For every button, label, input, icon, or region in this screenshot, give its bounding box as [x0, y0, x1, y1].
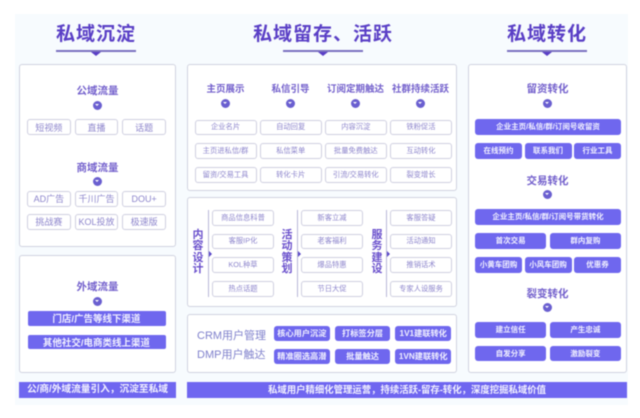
buttons: CRM: 1V1建联转化 [400, 329, 447, 338]
tags: public traffic: 直播 [88, 122, 106, 132]
tags row 2 [194, 142, 452, 160]
buttons: lead tools: 行业工具 [582, 146, 612, 155]
buttons: lead tools: 在线预约 [484, 146, 514, 155]
heading: 内容设计 [192, 228, 204, 275]
title: 私域留存、活跃: 私域留存、活跃 [253, 24, 393, 45]
buttons: trust and loyalty: 产生忠诚 [570, 325, 600, 334]
button: sales conversion: 企业主页/私信/群/订阅号带货转化 [492, 212, 604, 221]
tags row 1: 内容沉淀 [341, 122, 370, 131]
divider arrow [297, 210, 298, 297]
buttons: lead tools [474, 142, 622, 160]
title: 私域沉淀: 私域沉淀 [56, 24, 136, 45]
tags: service building [390, 210, 452, 298]
summary bar: left: 公/商/外域流量引入，沉淀至私域 [27, 384, 168, 395]
tags: service building: 活动通知 [406, 236, 436, 245]
heading: 服务建设: 设 [372, 263, 382, 275]
tags: public traffic: 话题 [135, 122, 153, 132]
heading: 活动策划: 划 [282, 263, 292, 275]
buttons: CRM: 核心用户沉淀 [277, 329, 326, 338]
heading: 外域流量: 外域流量 [76, 281, 118, 293]
buttons: trust and loyalty [474, 321, 622, 339]
title: 私域转化 [506, 23, 588, 56]
tags: commerce traffic row 2: 挑战赛 [35, 217, 62, 227]
buttons: group buying: 小黄车团购 [480, 260, 517, 269]
heading: 活动策划: 活 [282, 229, 292, 241]
tags row 2: 私信菜单 [276, 146, 305, 155]
title: 私域留存、活跃 [252, 23, 393, 56]
buttons: group buying: 小风车团购 [529, 260, 567, 269]
panel: conversion [468, 64, 627, 373]
tags: content design [212, 210, 274, 298]
icon: chevron [93, 176, 102, 186]
summary bar: middle and right [187, 382, 627, 398]
panel: public and commerce traffic [19, 64, 176, 247]
tags: campaign planning: 节日大促 [317, 284, 347, 293]
buttons: lead tools: 联系我们 [533, 146, 563, 155]
tags: commerce traffic row 1: AD广告 [34, 194, 64, 204]
tags row 2: 互动转化 [406, 146, 436, 155]
panel: content, campaigns, service [187, 197, 457, 307]
tags row 3: 留资/交易工具 [203, 170, 248, 179]
icon: chevron [543, 98, 552, 108]
tags: commerce traffic row 2 [26, 214, 166, 230]
tags row 2: 批量免费触达 [334, 146, 378, 155]
button: online channels: 其他社交/电商类线上渠道 [43, 338, 150, 349]
tags: campaign planning: 爆品特惠 [317, 260, 347, 269]
buttons: DMP: 精准圈选高潜 [277, 352, 326, 361]
heading: 内容设计: 内 [192, 229, 204, 241]
label: CRM: CRM用户管理 [197, 330, 266, 342]
tags row 3: 裂变增长 [406, 170, 436, 179]
button: offline channels: 门店/广告等线下渠道 [52, 314, 141, 325]
tags: campaign planning: 新客立减 [317, 213, 347, 222]
tags: content design: 客服IP化 [229, 236, 257, 245]
buttons: trust and loyalty: 建立信任 [496, 325, 526, 334]
icons: chevrons [220, 98, 426, 109]
heading: 活动策划: 策 [282, 252, 292, 264]
heading: 服务建设: 建 [372, 252, 382, 264]
heading: 内容设计: 设 [192, 252, 204, 264]
tags: campaign planning: 老客福利 [317, 236, 347, 245]
column headings: 私信引导 [271, 84, 310, 95]
tags row 1: 自动回复 [276, 122, 305, 131]
column headings: 订阅定期触达 [327, 84, 384, 95]
button: lead service: 企业主页/私信/群/订阅号收留资 [496, 122, 600, 131]
divider arrow [386, 210, 387, 297]
panel: CRM and DMP [187, 314, 457, 373]
buttons: DMP: 1VN建联转化 [399, 352, 448, 361]
panel: retention touchpoints [187, 64, 457, 191]
tags: public traffic: 短视频 [35, 122, 62, 132]
column headings: 主页展示 [206, 84, 244, 95]
buttons: sharing and fission [474, 345, 622, 362]
tags row 3: 转化卡片 [276, 170, 305, 179]
buttons: DMP: 批量触达 [346, 352, 379, 361]
buttons: CRM [273, 325, 452, 342]
heading: 公域流量: 公域流量 [76, 85, 118, 97]
icon: chevron [543, 303, 552, 312]
tags: commerce traffic row 2: KOL投放 [78, 217, 115, 227]
heading: 内容设计: 容 [192, 240, 204, 252]
tags: content design: 商品信息科普 [221, 213, 265, 222]
buttons: DMP [273, 348, 452, 365]
heading: 服务建设: 服 [372, 229, 382, 241]
icon: chevron [93, 100, 102, 110]
tags: commerce traffic row 1 [26, 190, 166, 208]
tags: service building: 专家人设服务 [399, 284, 443, 293]
buttons: purchases: 首次交易 [496, 236, 526, 245]
buttons: sharing and fission: 自发分享 [496, 349, 526, 358]
heading: 内容设计: 计 [192, 263, 204, 275]
tags: commerce traffic row 1: 千川广告 [78, 194, 115, 204]
column headings [206, 83, 450, 95]
title: 私域转化: 私域转化 [507, 24, 587, 45]
buttons: group buying: 优惠券 [586, 260, 609, 269]
summary bar: left [19, 382, 176, 398]
divider arrow [208, 210, 209, 297]
tags row 1: 铁粉促活 [406, 122, 436, 131]
tags row 3: 引流/交易转化 [333, 170, 379, 179]
heading: 留资转化: 留资转化 [526, 83, 568, 95]
tags: service building: 客服答疑 [406, 213, 436, 222]
column headings: 社群持续活跃 [392, 84, 449, 95]
heading: 裂变转化: 裂变转化 [526, 288, 568, 300]
buttons: purchases [474, 232, 622, 250]
heading: 服务建设: 务 [372, 240, 382, 252]
tags: commerce traffic row 2: 极速版 [131, 217, 158, 227]
tags: commerce traffic row 1: DOU+ [132, 194, 157, 204]
tags row 3 [194, 166, 452, 184]
tags: content design: 热点话题 [228, 284, 258, 293]
heading: 交易转化: 交易转化 [526, 175, 568, 187]
panel: external traffic [19, 255, 176, 373]
tags: campaign planning [300, 210, 364, 298]
icon: chevron [93, 296, 102, 306]
tags: content design: KOL种草 [228, 260, 258, 269]
heading: 活动策划 [281, 228, 293, 275]
buttons: sharing and fission: 激励裂变 [570, 349, 600, 358]
heading: 商域流量: 商域流量 [76, 162, 118, 174]
buttons: group buying [474, 256, 622, 274]
buttons: purchases: 群内复购 [570, 236, 600, 245]
summary bar: middle and right: 私域用户精细化管理运营，持续活跃-留存-转化，深度挖掘私域价值 [268, 384, 546, 395]
icon: chevron [543, 190, 552, 198]
tags row 2: 主页进私信/群 [203, 146, 248, 155]
tags: public traffic [26, 118, 166, 136]
buttons: CRM: 打标签分层 [342, 329, 383, 338]
heading: 服务建设 [371, 228, 383, 275]
label: DMP: DMP用户触达 [197, 349, 265, 361]
heading: 活动策划: 动 [282, 240, 292, 252]
tags row 1: 企业名片 [211, 122, 240, 131]
tags: service building: 推销话术 [406, 260, 436, 269]
tags row 1 [194, 120, 452, 136]
title: 私域沉淀 [55, 23, 137, 56]
